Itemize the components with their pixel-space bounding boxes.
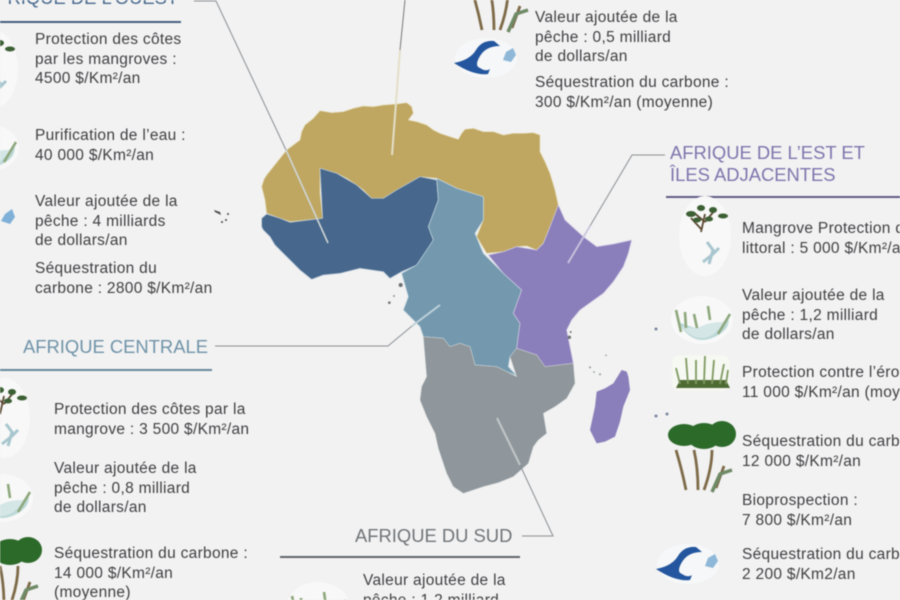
text: bioprospection est: Bioprospection : (742, 492, 858, 509)
heading: Afrique du Sud: AFRIQUE DU SUD (355, 525, 512, 546)
icon: vague est (656, 544, 719, 584)
text: carbone centrale: Séquestration du carbone : (54, 545, 248, 562)
text: carbone centrale (54, 545, 248, 600)
text: protection centrale: Protection des côtes par la (54, 401, 246, 418)
text: carbone est (742, 433, 900, 470)
icon: arbre centrale (0, 537, 42, 600)
text: pêche est: pêche : 1,2 milliard (742, 307, 878, 324)
text: purification: Purification de l’eau : (35, 127, 186, 144)
icon: vague nord (454, 38, 517, 78)
rule: Afrique du Sud (280, 556, 520, 558)
text: pêche ouest (34, 193, 178, 249)
text: carbone est: 12 000 $/Km²/an (742, 453, 861, 470)
icon: roseaux ouest (0, 124, 19, 172)
text: pêche est: Valeur ajoutée de la (742, 287, 885, 304)
leader line: Afrique de l'Ouest (194, 1, 328, 243)
icon: mangrove centrale (0, 378, 30, 458)
text: pêche centrale: pêche : 0,8 milliard (54, 480, 190, 497)
text: protection des côtes ouest (34, 31, 182, 87)
text: carbone nord (535, 74, 729, 112)
icon: roseaux sud (287, 582, 349, 600)
text: carbone nord: Séquestration du carbone : (535, 74, 729, 91)
region: Afrique centrale (402, 178, 522, 376)
text: carbone bleu est (742, 546, 900, 583)
text: pêche sud: Valeur ajoutée de la (363, 572, 506, 589)
text: pêche ouest: Valeur ajoutée de la (35, 193, 178, 210)
icon: mangrove est (679, 196, 731, 276)
text: bioprospection est (742, 492, 858, 529)
icon: roseaux est (671, 296, 733, 344)
leader line: Afrique centrale (215, 305, 440, 346)
text: pêche centrale: Valeur ajoutée de la (54, 460, 197, 477)
text: pêche est (742, 287, 885, 343)
icon: vague ouest (1, 209, 15, 224)
leader line: Afrique du Nord (392, 0, 405, 155)
region: Afrique de l'Ouest (262, 168, 438, 279)
region: Madagascar (590, 370, 630, 443)
heading: Afrique de l'Est: AFRIQUE DE L’EST ET (670, 142, 865, 163)
text: protection des côtes ouest: 4500 $/Km²/an (35, 70, 141, 87)
text: pêche centrale (54, 460, 197, 516)
text: pêche nord: pêche : 0,5 milliard (535, 29, 671, 46)
heading: Afrique de l'Est: ÎLES ADJACENTES (670, 164, 836, 185)
icon: herbes est (672, 355, 730, 391)
leader line: Afrique du Sud (497, 418, 553, 536)
text: bioprospection est: 7 800 $/Km²/an (742, 512, 852, 529)
text: protection des côtes ouest: Protection des côtes (35, 31, 181, 48)
islands west (214, 210, 229, 223)
icon: arbre est (668, 421, 736, 492)
region: Afrique du Nord (262, 103, 558, 253)
rule: Afrique de l'Ouest (0, 21, 181, 23)
text: protection centrale (54, 401, 249, 438)
text: carbone centrale: 14 000 $/Km²/an (54, 565, 173, 582)
heading: Afrique centrale: AFRIQUE CENTRALE (23, 336, 208, 357)
text: pêche centrale: de dollars/an (54, 499, 147, 516)
text: pêche ouest: pêche : 4 milliards (35, 213, 166, 230)
islands east (654, 328, 668, 418)
text: pêche nord (534, 9, 678, 65)
text: pêche ouest: de dollars/an (35, 232, 128, 249)
icon: roseaux centrale (0, 474, 33, 522)
text: pêche est: de dollars/an (742, 326, 835, 343)
small islands (388, 283, 572, 339)
heading: Afrique de l'Est (669, 142, 865, 185)
text: érosion est (742, 364, 900, 402)
text: carbone ouest: carbone : 2800 $/Km²/an (35, 280, 213, 297)
text: carbone bleu est: 2 200 $/Km2/an (742, 566, 856, 583)
text: pêche sud (362, 572, 506, 600)
text: protection des côtes ouest: par les mangroves : (35, 51, 177, 68)
text: purification: 40 000 $/Km²/an (35, 147, 154, 164)
text: carbone nord: 300 $/Km²/an (moyenne) (535, 94, 713, 111)
icon: arbre nord (464, 0, 532, 32)
region: Afrique du Sud (420, 337, 575, 493)
icon: mangrove ouest (0, 29, 18, 109)
text: mangrove est (742, 220, 900, 257)
text: pêche nord: de dollars/an (535, 48, 628, 65)
text: carbone ouest: Séquestration du (35, 260, 157, 277)
text: purification (34, 127, 186, 164)
text: carbone ouest (34, 260, 213, 297)
rule: Afrique de l'Est (666, 196, 900, 198)
leader line: Afrique de l'Est (568, 155, 665, 263)
rule: Afrique centrale (0, 369, 212, 371)
text: pêche nord: Valeur ajoutée de la (535, 9, 678, 26)
text: protection centrale: mangrove : 3 500 $/Km²/an (54, 421, 249, 438)
region: Afrique de l'Est (488, 205, 632, 367)
